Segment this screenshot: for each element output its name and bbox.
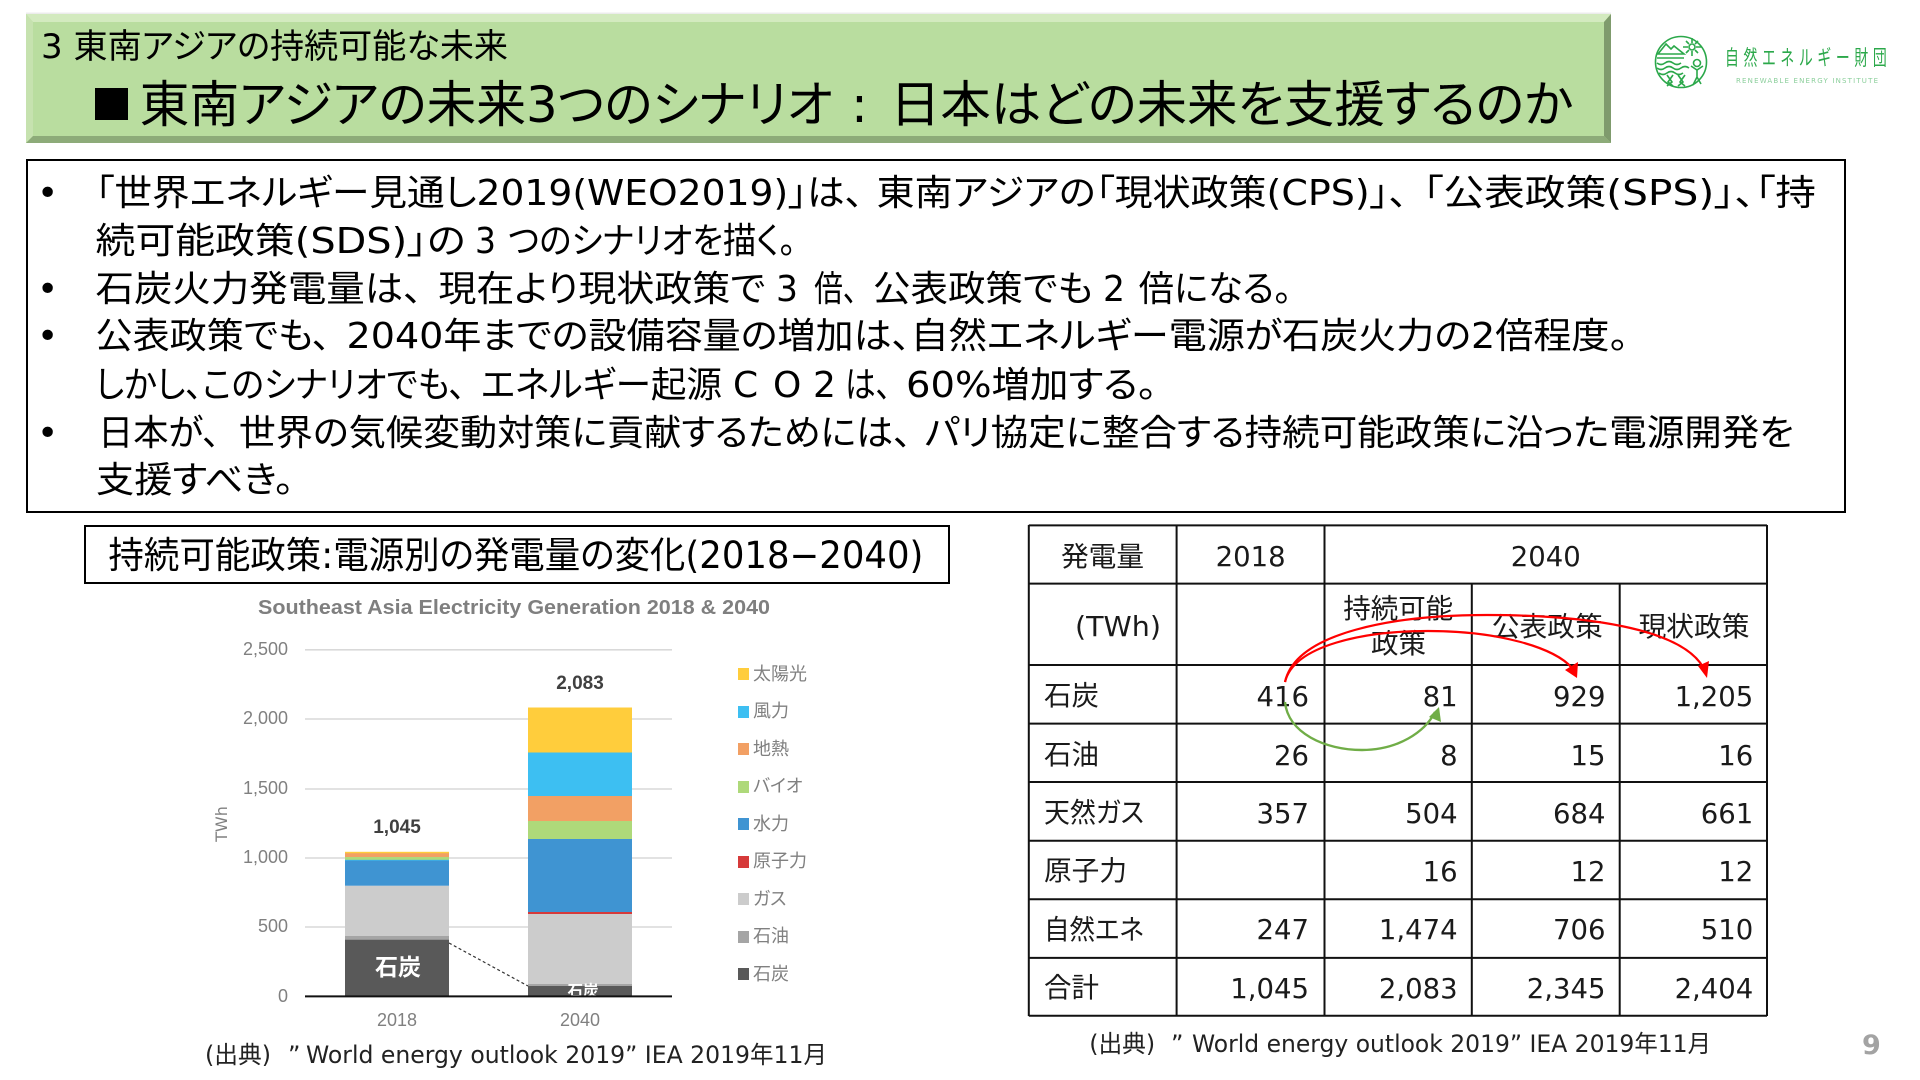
bullet 1: つのシナリオを描く。 (508, 221, 796, 262)
key points text box (27, 160, 1845, 512)
row: coal (1044, 680, 1753, 713)
bullet 2: 公表政策でも (873, 269, 1093, 310)
bullet 4: 支援すべき。 (96, 460, 294, 501)
y axis title: TWh (212, 806, 231, 843)
x axis labels: 2018 (377, 1010, 417, 1030)
row: oil: 8 (1440, 740, 1458, 772)
bullet 1: 3 (475, 221, 496, 262)
bullet 2: 倍になる。 (1139, 269, 1292, 310)
row: nuclear (1044, 855, 1753, 888)
arrow: coal to sustainable development (1285, 702, 1441, 750)
main title: : (851, 76, 868, 134)
legend: バイオ (753, 776, 803, 796)
bullet 3: 2 (813, 365, 836, 406)
row: oil: 石油 (1044, 739, 1099, 771)
bullet 1: 東南アジアの「現状政策(CPS)」、 (877, 173, 1408, 214)
chart source note: (出典) (205, 1041, 271, 1069)
row: oil: 16 (1718, 740, 1753, 772)
logo: renewable energy institute (1656, 36, 1887, 88)
row: total: 1,045 (1230, 973, 1309, 1005)
header row: 2018 (1216, 541, 1286, 573)
bullet 4: 世界の気候変動対策に貢献するためには、 (239, 413, 912, 454)
row: total (1044, 972, 1753, 1005)
bullet 3: 2040年までの設備容量の増加は、自然エネルギー電源が石炭火力の2倍程度。 (346, 316, 1628, 357)
generation table (1029, 525, 1767, 1016)
bullet 4: 日本が、 (98, 413, 220, 454)
legend: ガス (753, 889, 786, 909)
bullet 3 (37, 316, 1628, 406)
bullet 1: 「公表政策(SPS)」、「持 (1423, 173, 1816, 214)
header row: 現状政策 (1638, 611, 1750, 643)
row: total: 合計 (1044, 972, 1099, 1004)
header row: 発電量 (1061, 541, 1144, 573)
bullet 1: 続可能政策(SDS)」の (96, 221, 466, 262)
y axis labels (243, 639, 288, 1006)
main title: 東南アジアの未来3つのシナリオ (140, 76, 833, 134)
row: coal: 1,205 (1675, 681, 1753, 713)
row: total: 2,404 (1675, 973, 1753, 1005)
y axis labels: 1,500 (243, 778, 288, 798)
bullet 1: • (37, 173, 58, 214)
bullet 2: 石炭火力発電量は、 (96, 269, 422, 310)
y axis labels: 2,500 (243, 639, 288, 659)
logo name: 自然エネルギー財団 (1725, 46, 1887, 71)
row: total: 2,083 (1379, 973, 1458, 1005)
header row: (TWh) (1075, 611, 1161, 643)
row: renewables (1044, 914, 1753, 946)
bullet 3: C (733, 365, 758, 406)
row: coal: 石炭 (1044, 680, 1099, 712)
bar label coal 2040: 石炭 (567, 982, 599, 1000)
row: renewables: 1,474 (1379, 914, 1458, 946)
bullet 3: しかし、このシナリオでも、 (96, 365, 466, 406)
section subtitle: 3 東南アジアの持続可能な未来 (41, 27, 508, 67)
legend: 風力 (753, 701, 789, 721)
y axis labels: 0 (278, 986, 288, 1006)
row: renewables: 自然エネ (1044, 914, 1144, 946)
bullet 3: O (773, 365, 801, 406)
bullet 2: 現在より現状政策で (438, 269, 765, 310)
arrow: coal to stated policies (1285, 631, 1578, 682)
page number: 9 (1862, 1030, 1881, 1061)
main title (95, 76, 1573, 134)
bullet 1: 「世界エネルギー見通し2019(WEO2019)」は、 (96, 173, 864, 214)
stacked bar chart (212, 597, 807, 1030)
row: oil: 26 (1274, 740, 1309, 772)
legend: 地熱 (753, 739, 789, 759)
chart source note: ” (288, 1041, 300, 1069)
total label 2018: 1,045 (373, 817, 421, 838)
row: natural gas: 357 (1256, 798, 1309, 830)
logo mark (1656, 36, 1706, 88)
bar label coal 2018: 石炭 (375, 955, 421, 981)
legend: 太陽光 (753, 664, 807, 684)
row: natural gas (1044, 797, 1753, 830)
row: nuclear: 12 (1718, 856, 1753, 888)
header row: 持続可能 (1343, 593, 1453, 625)
header row: 政策 (1371, 628, 1426, 660)
title banner (26, 12, 1611, 143)
bullet 3: • (37, 316, 58, 357)
bar 2018 (345, 852, 449, 996)
bullet 2: • (37, 269, 58, 310)
bullet 2: 倍、 (814, 269, 857, 310)
row: renewables: 247 (1256, 914, 1309, 946)
row: natural gas: 661 (1701, 798, 1753, 830)
total label 2040: 2,083 (556, 673, 604, 694)
dotted coal connector (449, 943, 528, 986)
arrow: coal to current policies (1285, 615, 1709, 682)
x axis line (305, 995, 672, 997)
y axis labels: 500 (258, 916, 288, 936)
bullet 4: • (37, 413, 58, 454)
bullet 3: は、 (845, 365, 891, 406)
y axis gridlines (305, 650, 672, 927)
legend: 水力 (753, 814, 789, 834)
row: natural gas: 684 (1553, 798, 1606, 830)
table source note: (出典) (1089, 1030, 1155, 1058)
header row: 公表政策 (1492, 611, 1603, 643)
bullet 2 (37, 269, 1292, 310)
legend: 石炭 (753, 964, 789, 984)
row: natural gas: 504 (1405, 798, 1458, 830)
bullet 2: 3 (776, 269, 798, 310)
legend: 原子力 (753, 851, 807, 871)
row: nuclear: 原子力 (1044, 855, 1127, 887)
bullet 3: 60%増加する。 (906, 365, 1157, 406)
legend: 石油 (753, 926, 789, 946)
logo english name: RENEWABLE ENERGY INSTITUTE (1736, 77, 1878, 85)
chart title: Southeast Asia Electricity Generation 2018 & 2040 (258, 597, 770, 619)
x axis labels: 2040 (560, 1010, 600, 1030)
row: coal: 416 (1256, 681, 1309, 713)
row: oil (1044, 739, 1753, 772)
bullet 2: 2 (1103, 269, 1125, 310)
row: renewables: 706 (1553, 914, 1606, 946)
y axis labels: 2,000 (243, 708, 288, 728)
row: nuclear: 16 (1423, 856, 1458, 888)
bullet 4 (37, 413, 1794, 501)
bullet 3: エネルギー起源 (481, 365, 722, 406)
row: oil: 15 (1570, 740, 1606, 772)
legend (738, 664, 807, 984)
row: coal: 929 (1553, 681, 1606, 713)
row: renewables: 510 (1701, 914, 1753, 946)
row: natural gas: 天然ガス (1044, 797, 1144, 829)
main title: 日本はどの未来を支援するのか (890, 76, 1573, 134)
y axis labels: 1,000 (243, 847, 288, 867)
bullet 1 (37, 173, 1816, 262)
bullet 4: パリ協定に整合する持続可能政策に沿った電源開発を (924, 413, 1794, 454)
header row: 2040 (1511, 541, 1581, 573)
table source note: World energy outlook 2019” IEA 2019年11月 (1192, 1030, 1711, 1058)
row: coal: 81 (1423, 681, 1458, 713)
row: nuclear: 12 (1570, 856, 1606, 888)
chart heading box: 持続可能政策:電源別の発電量の変化(2018−2040) (108, 534, 923, 577)
table source note: ” (1171, 1030, 1183, 1058)
chart source note: World energy outlook 2019” IEA 2019年11月 (306, 1041, 827, 1069)
x axis labels (377, 1010, 600, 1030)
table grid (1029, 525, 1767, 1016)
bar 2040 (528, 708, 632, 1000)
row: total: 2,345 (1527, 973, 1606, 1005)
bullet 3: 公表政策でも、 (96, 316, 330, 357)
header row (1061, 541, 1750, 660)
